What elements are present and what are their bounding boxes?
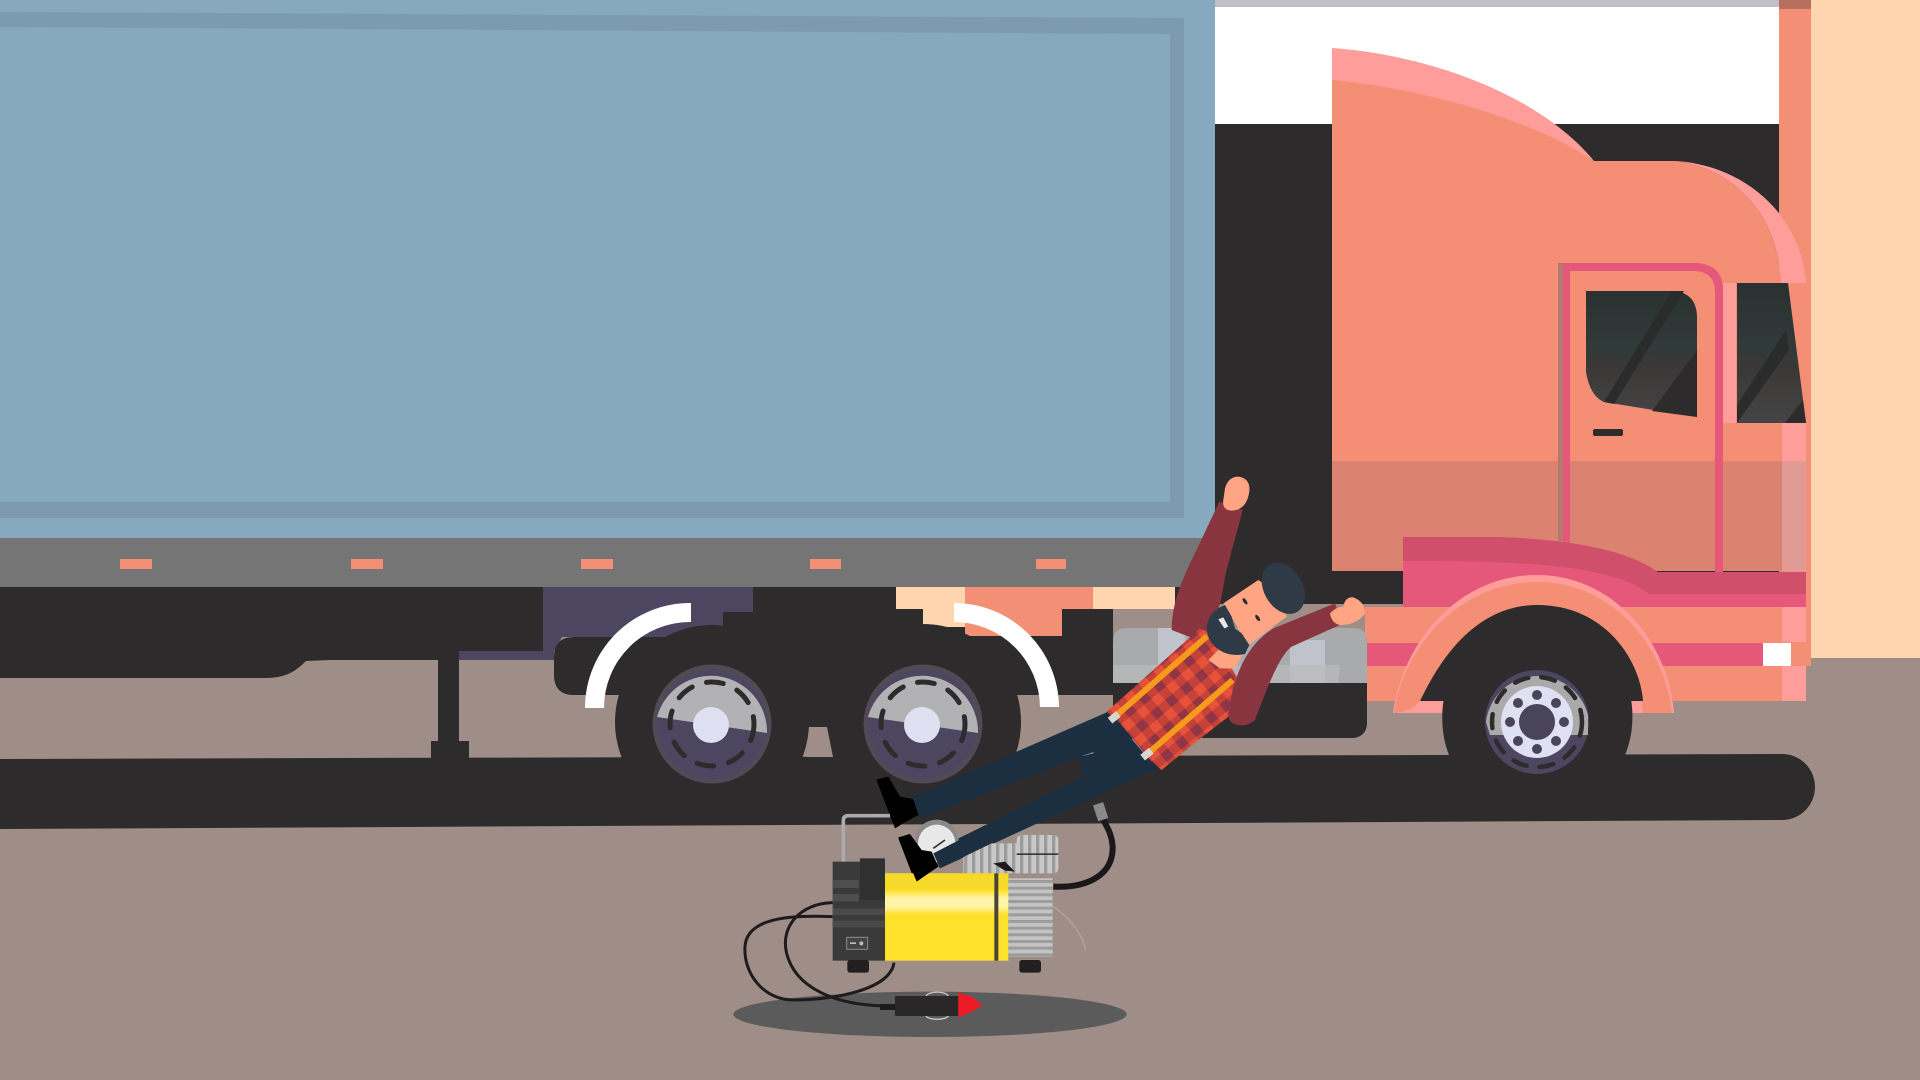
door window — [1586, 291, 1697, 417]
bumper pink stripe — [1366, 643, 1763, 666]
front bumper — [1365, 607, 1806, 701]
boot overlap on compressor — [877, 777, 1047, 882]
lower body shade — [1332, 461, 1806, 571]
windshield — [1737, 283, 1806, 423]
eyes — [1242, 597, 1261, 622]
beard — [1207, 605, 1249, 655]
pressure gauge — [915, 820, 959, 864]
door frame — [1563, 263, 1723, 572]
neck — [1208, 647, 1243, 668]
hair — [1253, 555, 1314, 622]
front tyre — [1442, 635, 1632, 755]
trailer underbody rear — [0, 587, 554, 678]
trailer side rail — [0, 538, 1215, 587]
power cables — [745, 903, 894, 1006]
back arm — [1172, 502, 1243, 638]
trailer box — [0, 0, 1215, 538]
background: wall and post — [1215, 0, 1920, 658]
front arm — [1228, 603, 1343, 725]
trailer underbody front — [700, 587, 1215, 727]
right pillar — [1782, 423, 1806, 461]
legs — [910, 712, 1157, 868]
suspenders — [1115, 636, 1233, 754]
fender highlight — [1393, 575, 1674, 713]
mouth — [1218, 617, 1228, 628]
trailer frame — [0, 12, 1184, 518]
suspender clips — [1110, 714, 1151, 758]
pillar strip — [1723, 283, 1736, 423]
bumper dark base — [1113, 628, 1367, 738]
air compressor — [733, 777, 1127, 1037]
wheel arch interior — [1420, 605, 1643, 701]
plaid shirt — [1107, 628, 1237, 770]
cylinder head fins — [963, 843, 1020, 873]
fender — [1394, 582, 1672, 713]
rear mudflap block — [554, 637, 710, 695]
door hinge stripe — [1558, 263, 1563, 541]
compressor feet — [847, 960, 1041, 973]
hood crimson band — [1403, 537, 1806, 594]
front hand — [1330, 597, 1365, 625]
rear hub left — [655, 667, 769, 781]
road shadow band — [0, 754, 1815, 829]
boots — [877, 777, 938, 882]
roof fairing highlight — [1332, 48, 1594, 200]
cab body — [1332, 80, 1806, 537]
cab — [1332, 48, 1811, 774]
rail marker lights — [120, 559, 1066, 569]
peach and orange chassis blocks — [896, 587, 1175, 636]
rear tyres — [615, 624, 1021, 820]
air hose — [1053, 820, 1113, 887]
motor housing — [885, 873, 1008, 961]
cab roof highlight — [1676, 161, 1806, 283]
cigarette lighter plug — [880, 992, 983, 1019]
ground shadow — [733, 992, 1127, 1037]
worker falling backwards — [877, 477, 1365, 882]
control box — [833, 858, 885, 961]
rear bumper of cab — [1113, 628, 1367, 738]
bumper pink corner — [1782, 607, 1806, 701]
cooling fins — [1008, 878, 1053, 957]
trailer — [0, 0, 1215, 758]
bumper grey panel — [1113, 628, 1367, 683]
front hub — [1485, 670, 1589, 774]
face — [1223, 580, 1287, 645]
purple chassis panel — [459, 587, 753, 660]
white mudguard arcs — [585, 603, 1059, 708]
landing gear — [431, 655, 469, 758]
hood bright band — [1403, 561, 1806, 607]
carrying handle — [843, 816, 890, 867]
rear hub right — [866, 667, 980, 781]
back hand — [1223, 477, 1249, 511]
vibration mark — [1053, 907, 1086, 951]
headlight — [1763, 643, 1791, 666]
door handle — [1593, 429, 1623, 436]
